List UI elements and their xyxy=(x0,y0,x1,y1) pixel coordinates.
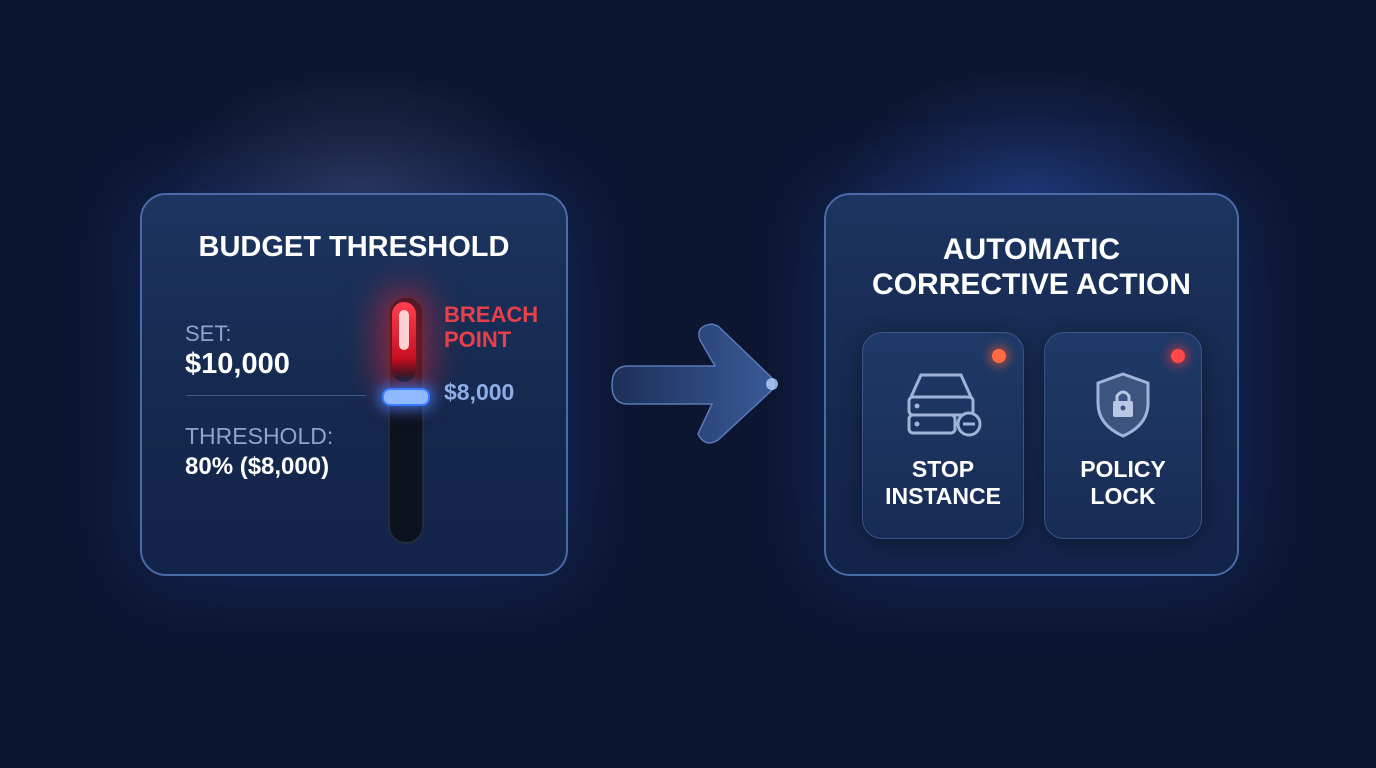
slider gauge xyxy=(354,268,454,544)
text: set: SET: xyxy=(185,321,231,346)
text: threshold: 80% ($8,000) xyxy=(185,453,329,480)
card: policy lock: POLICY xyxy=(1080,456,1166,482)
text: threshold xyxy=(185,423,333,480)
heading: AUTOMATIC xyxy=(943,233,1120,266)
card: policy lock xyxy=(1044,332,1202,539)
card: stop instance: INSTANCE xyxy=(885,483,1001,509)
card: stop instance: STOP xyxy=(912,456,974,482)
label: breach point: BREACH xyxy=(444,302,538,327)
text: set: $10,000 xyxy=(185,348,290,380)
card: stop instance xyxy=(862,332,1024,539)
panel: automatic corrective action xyxy=(824,193,1239,576)
panel: budget threshold xyxy=(140,193,568,576)
label: breach point: POINT xyxy=(444,327,511,352)
label: breach point xyxy=(444,302,538,352)
icon: shield lock xyxy=(1096,372,1150,438)
heading xyxy=(872,233,1191,301)
arrow xyxy=(611,323,778,444)
icon: server xyxy=(908,374,982,436)
heading: BUDGET THRESHOLD xyxy=(199,231,509,263)
card: policy lock: LOCK xyxy=(1090,483,1156,509)
text: set xyxy=(185,321,290,380)
heading: CORRECTIVE ACTION xyxy=(872,268,1191,301)
text: threshold: THRESHOLD: xyxy=(185,423,333,449)
label: $8,000: $8,000 xyxy=(444,379,514,405)
